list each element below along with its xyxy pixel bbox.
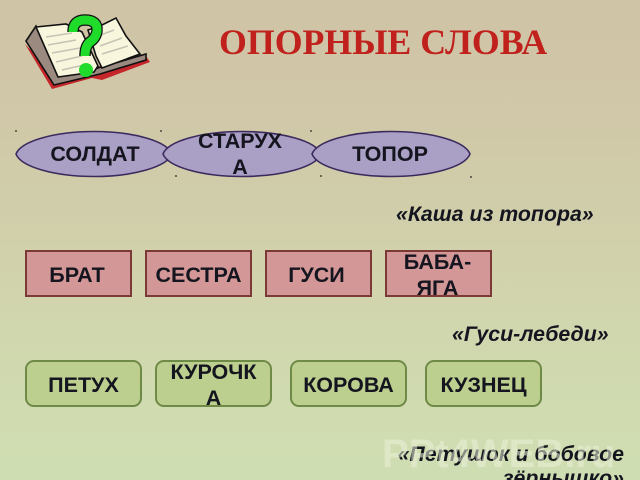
ellipse: axe [311,130,471,178]
box: Baba Yaga: БАБА- [404,250,471,274]
caption: tale two: «Гуси-лебеди» [452,322,609,346]
box: cow [290,360,407,407]
box: rooster: ПЕТУХ [48,373,119,397]
ellipse: old woman [162,130,316,178]
watermark: PPt4WEB.ru [382,432,615,476]
box: hen: А [206,386,221,410]
label: old woman: А [232,155,248,179]
box: geese: ГУСИ [288,263,345,287]
ellipse: soldier [15,130,168,178]
box: geese [265,250,372,297]
box: rooster [25,360,142,407]
box: Baba Yaga: ЯГА [417,276,458,300]
box: brother [25,250,132,297]
label: old woman: СТАРУХ [198,129,282,153]
box: blacksmith: КУЗНЕЦ [440,373,527,397]
row of ellipses: characters of the first tale [15,129,471,179]
label: old woman [198,129,282,179]
box: brother: БРАТ [49,263,105,287]
box: hen [155,360,272,407]
box: sister [145,250,252,297]
icon: open book with question mark [25,14,150,89]
label: axe: ТОПОР [352,142,428,166]
box: sister: СЕСТРА [156,263,241,287]
box: Baba Yaga [385,250,492,297]
box: cow: КОРОВА [303,373,394,397]
caption: tale one: «Каша из топора» [396,202,594,226]
box: blacksmith [425,360,542,407]
box: hen: КУРОЧК [170,360,257,384]
label: soldier: СОЛДАТ [50,142,140,166]
title: ОПОРНЫЕ СЛОВА [219,22,547,62]
